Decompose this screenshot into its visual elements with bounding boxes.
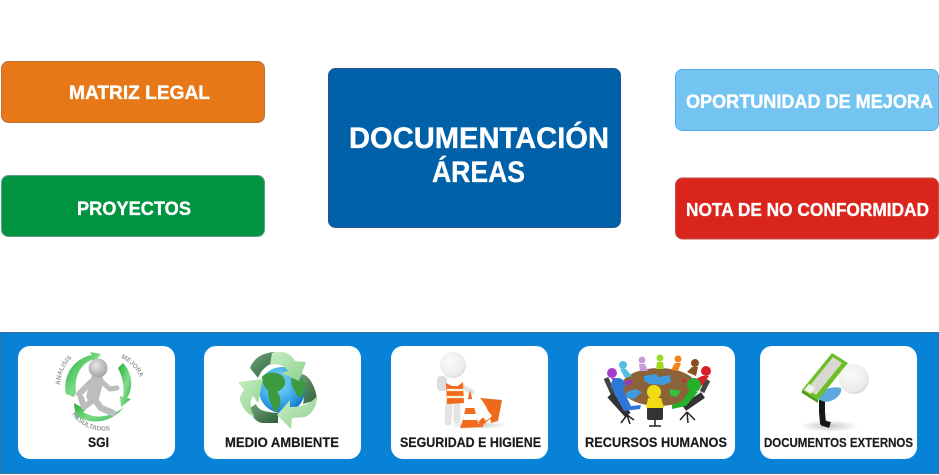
box: nota de no conformidad: NOTA DE NO CONFORMIDAD [686, 199, 929, 220]
label: medio ambiente: MEDIO AMBIENTE [225, 435, 339, 450]
card: seguridad e higiene [391, 346, 548, 459]
card: medio ambiente [204, 346, 361, 459]
box: documentación áreas [328, 68, 620, 228]
icon: person carrying binder [799, 353, 869, 432]
icon: safety worker with cones [437, 352, 508, 429]
box: oportunidad de mejora: OPORTUNIDAD DE MEJORA [686, 92, 933, 113]
box: proyectos [2, 176, 264, 236]
card: SGI [18, 346, 175, 459]
box: matriz legal: MATRIZ LEGAL [69, 83, 210, 104]
panel: area categories band [0, 332, 939, 474]
icon: SGI running figure with green arrows: ANALISIS [56, 356, 72, 385]
icon: team around puzzle table [606, 354, 711, 426]
box: documentación áreas: DOCUMENTACIÓN [349, 121, 609, 155]
box: matriz legal [2, 62, 264, 122]
icon: SGI running figure with green arrows: RESULTADOS [72, 412, 110, 431]
box: documentación áreas: ÁREAS [432, 155, 525, 189]
icon: SGI running figure with green arrows: MEJORA [122, 354, 144, 378]
card: recursos humanos [578, 346, 735, 459]
box: nota de no conformidad [676, 178, 938, 239]
label: recursos humanos: RECURSOS HUMANOS [585, 435, 727, 450]
box: oportunidad de mejora [676, 70, 938, 130]
label: documentos externos: DOCUMENTOS EXTERNOS [764, 436, 913, 450]
card: documentos externos [760, 346, 917, 459]
label: seguridad e higiene: SEGURIDAD E HIGIENE [400, 435, 541, 450]
icon: SGI running figure with green arrows [56, 352, 144, 431]
box: proyectos: PROYECTOS [77, 199, 191, 220]
label: SGI: SGI [88, 435, 109, 450]
icon: recycling globe [238, 352, 317, 429]
